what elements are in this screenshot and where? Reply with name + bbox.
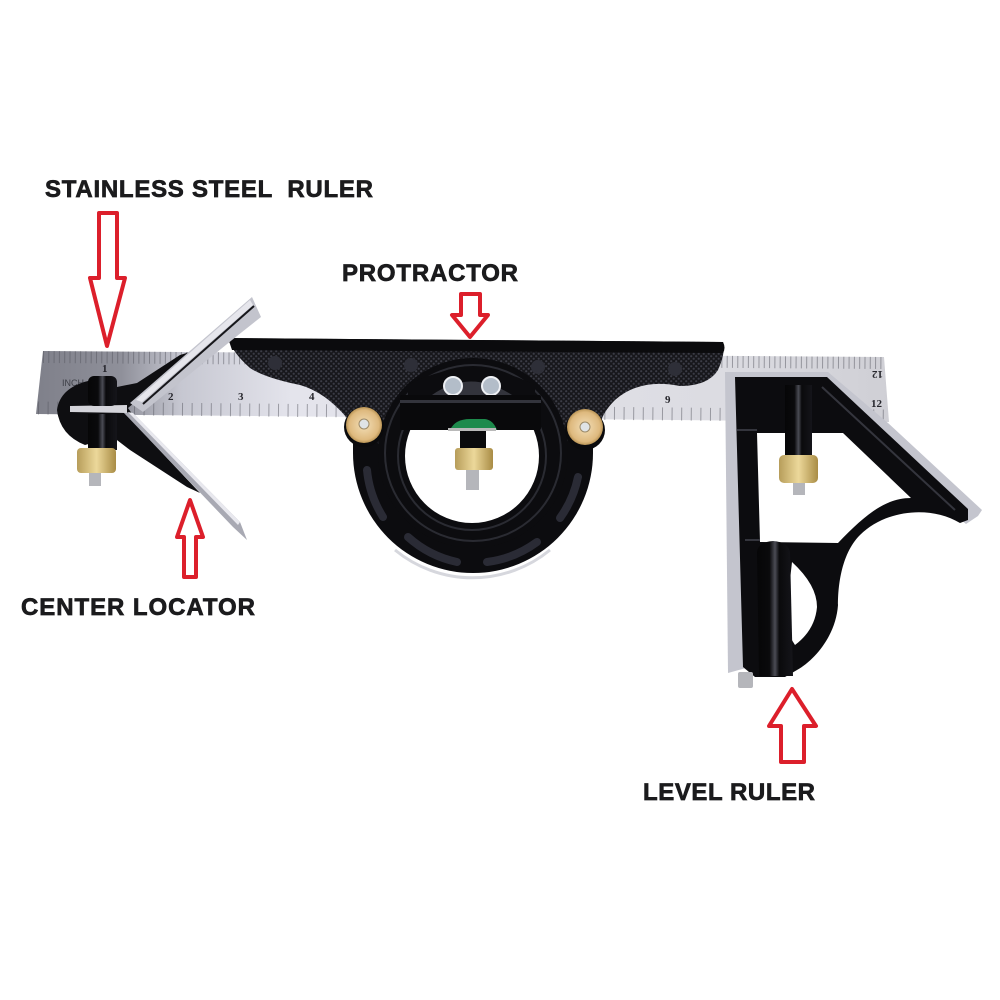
protractor silver rim	[395, 550, 550, 578]
protractor rivets	[268, 356, 682, 376]
arrow: level ruler	[769, 689, 816, 762]
ruler number 12 inverted: 12	[872, 368, 883, 380]
green bubble	[784, 595, 788, 625]
stainless steel ruler: 9	[665, 394, 671, 406]
protractor	[228, 338, 724, 578]
protractor top bar	[228, 338, 724, 353]
locator lower blade	[123, 412, 247, 540]
protractor slots	[367, 470, 578, 562]
stainless steel ruler: 3	[238, 391, 244, 403]
head pin	[738, 672, 753, 688]
stainless steel ruler: INCH	[62, 378, 84, 388]
arrow: stainless steel ruler	[90, 213, 125, 346]
stainless steel ruler: 2	[168, 391, 174, 403]
locator nut	[77, 448, 116, 473]
protractor hole	[405, 389, 539, 523]
locator black body	[57, 352, 200, 493]
head upper cylinder	[785, 385, 812, 455]
locator upper blade	[130, 297, 261, 412]
locator centre blade	[70, 405, 127, 413]
arrow: center locator	[177, 500, 203, 577]
head level cylinder	[757, 541, 793, 676]
protractor ring face	[378, 358, 568, 548]
protractor window plate	[432, 382, 512, 395]
arrow: protractor	[452, 294, 488, 337]
protractor ring	[353, 440, 593, 573]
right knob	[565, 409, 605, 450]
protractor window	[408, 368, 535, 396]
head left steel strip	[725, 372, 746, 673]
ruler number 12: 12	[871, 398, 882, 410]
protractor level bar	[400, 395, 541, 430]
centre screw	[466, 470, 479, 490]
locator screw	[89, 473, 101, 486]
locator cylinder bottom	[88, 414, 117, 450]
square head	[725, 372, 982, 688]
centre nut	[455, 448, 493, 470]
stainless steel ruler: 1	[102, 363, 108, 375]
left knob	[344, 407, 384, 447]
label: protractor: PROTRACTOR	[342, 260, 518, 287]
label: level ruler: LEVEL RULER	[643, 779, 815, 806]
centre stem	[460, 431, 486, 451]
label: center locator: CENTER LOCATOR	[21, 594, 255, 621]
stainless steel ruler	[36, 351, 889, 422]
locator cylinder top	[88, 376, 117, 406]
head nut	[779, 455, 818, 483]
head ridge highlights	[737, 387, 955, 540]
stainless steel ruler: 4	[309, 391, 315, 403]
green vial	[450, 419, 497, 430]
protractor screws	[444, 377, 500, 395]
head top steel strip	[725, 372, 982, 524]
label: stainless steel ruler: STAINLESS STEEL RULER	[45, 176, 373, 203]
center locator	[57, 297, 261, 540]
protractor base	[228, 338, 724, 445]
head black casting	[735, 377, 968, 677]
head screw	[793, 483, 805, 495]
